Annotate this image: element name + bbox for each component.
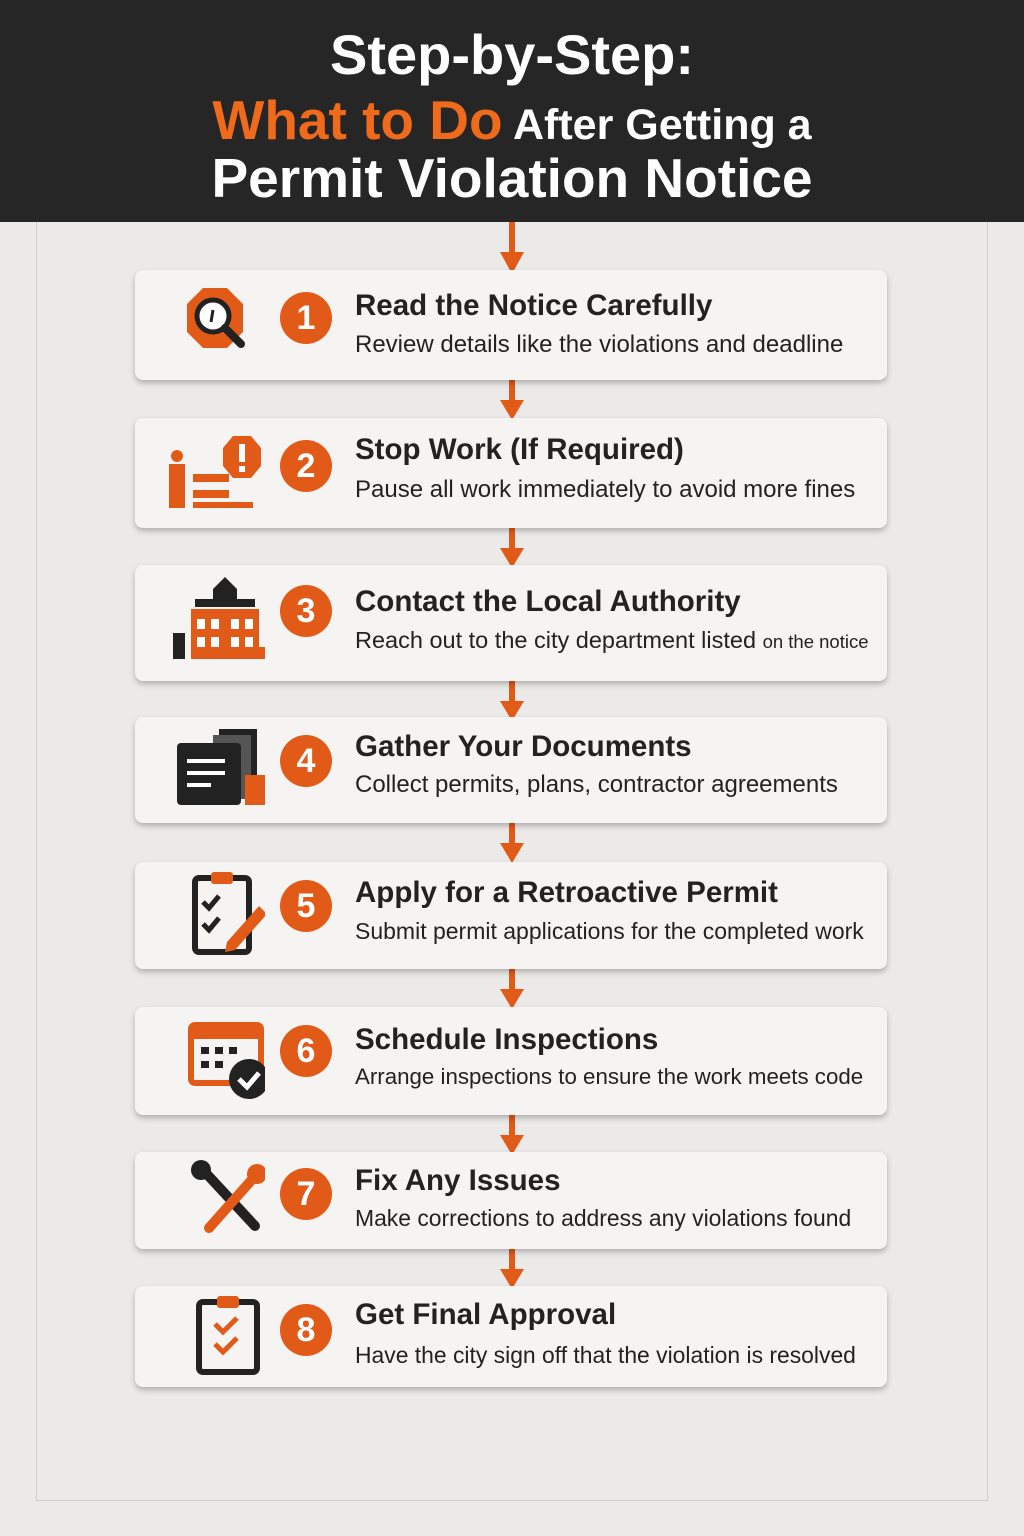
heading: Schedule Inspections bbox=[355, 1023, 658, 1056]
number 7 bbox=[280, 1168, 332, 1220]
text: Reach out to the city department listed on the notice bbox=[355, 627, 869, 653]
number 4: 4 bbox=[297, 742, 315, 780]
icon: tools bbox=[191, 1160, 265, 1233]
arrow 7 bbox=[500, 1115, 524, 1152]
number 6: 6 bbox=[297, 1032, 315, 1070]
panel: step 1 bbox=[135, 270, 887, 380]
icon: stop work bbox=[169, 436, 261, 508]
title line 1: Step-by-Step: bbox=[330, 23, 694, 86]
number 1 bbox=[280, 292, 332, 344]
panel: step 7 bbox=[135, 1152, 887, 1249]
icon: magnifier bbox=[187, 288, 245, 348]
title line 3: Permit Violation Notice bbox=[211, 147, 813, 209]
number 4 bbox=[280, 735, 332, 787]
text: Submit permit applications for the completed work bbox=[355, 918, 864, 944]
heading: Contact the Local Authority bbox=[355, 585, 741, 618]
number 8: 8 bbox=[297, 1311, 315, 1349]
number 3 bbox=[280, 585, 332, 637]
arrow 3 bbox=[500, 528, 524, 565]
heading: Fix Any Issues bbox=[355, 1164, 560, 1197]
heading: Apply for a Retroactive Permit bbox=[355, 876, 778, 909]
number 1: 1 bbox=[297, 299, 315, 337]
panel: step 3 bbox=[135, 565, 887, 681]
text: Have the city sign off that the violation is resolved bbox=[355, 1342, 856, 1368]
panel: step 2 bbox=[135, 418, 887, 528]
arrow 4 bbox=[500, 681, 524, 717]
text: Collect permits, plans, contractor agreements bbox=[355, 771, 838, 798]
panel: step 5 bbox=[135, 862, 887, 969]
number 5 bbox=[280, 880, 332, 932]
arrow 2 bbox=[500, 380, 524, 418]
heading: Read the Notice Carefully bbox=[355, 289, 712, 322]
arrow 5 bbox=[500, 823, 524, 862]
heading: Stop Work (If Required) bbox=[355, 433, 684, 466]
title line 2: What to Do After Getting a bbox=[212, 89, 812, 151]
icon: documents bbox=[177, 729, 265, 805]
arrow 8 bbox=[500, 1249, 524, 1286]
arrow 6 bbox=[500, 969, 524, 1007]
number 3: 3 bbox=[297, 592, 315, 630]
number 7: 7 bbox=[297, 1175, 315, 1213]
heading: Get Final Approval bbox=[355, 1298, 616, 1331]
number 5: 5 bbox=[297, 887, 315, 925]
panel: step 4 bbox=[135, 717, 887, 823]
icon: checklist pencil bbox=[192, 872, 265, 955]
number 2 bbox=[280, 440, 332, 492]
arrow 1 bbox=[500, 222, 524, 270]
heading: Gather Your Documents bbox=[355, 730, 692, 763]
number 6 bbox=[280, 1025, 332, 1077]
text: Arrange inspections to ensure the work meets code bbox=[355, 1064, 863, 1089]
panel: step 6 bbox=[135, 1007, 887, 1115]
icon: government building bbox=[173, 577, 265, 659]
header bbox=[0, 0, 1024, 222]
text: Pause all work immediately to avoid more fines bbox=[355, 476, 855, 503]
number 8 bbox=[280, 1304, 332, 1356]
panel: step 8 bbox=[135, 1286, 887, 1387]
text: Review details like the violations and deadline bbox=[355, 331, 843, 358]
icon: calendar check bbox=[188, 1022, 265, 1099]
icon: clipboard approval bbox=[196, 1296, 260, 1375]
number 2: 2 bbox=[297, 447, 315, 485]
text: Make corrections to address any violations found bbox=[355, 1205, 851, 1231]
